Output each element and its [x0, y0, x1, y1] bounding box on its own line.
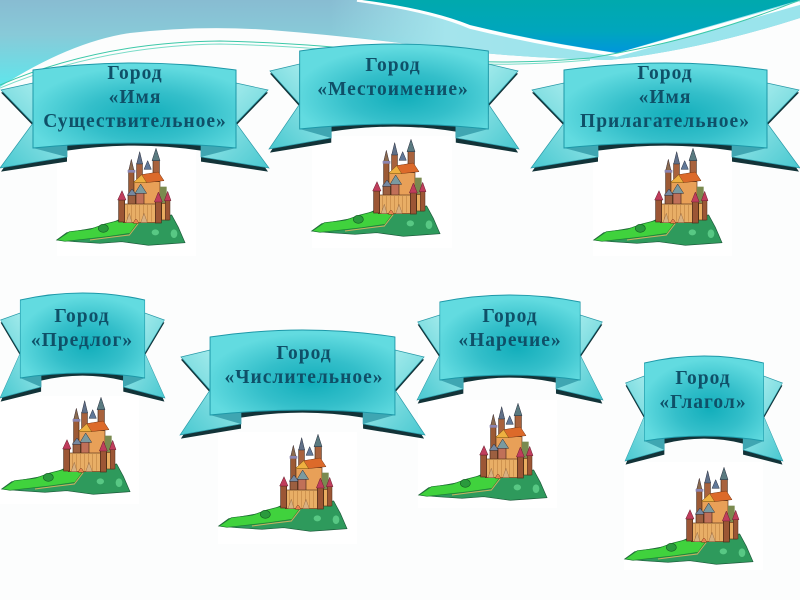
banner: Город Местоимение	[269, 44, 519, 153]
banner: Город Имя Прилагательное	[531, 63, 800, 172]
banner: Город Имя Существительное: «Имя	[109, 87, 161, 108]
banner: Город Числительное	[180, 330, 425, 439]
castle: Существительное	[57, 148, 185, 245]
banner: Город Имя Существительное	[0, 63, 269, 172]
banner: Город Имя Существительное: Город	[107, 63, 163, 84]
banner: Город Наречие: Город	[482, 306, 538, 327]
castle: Прилагательное	[594, 148, 722, 245]
banner: Город Местоимение: «Местоимение»	[317, 79, 469, 100]
castle: Числительное	[219, 434, 347, 531]
banner: Город Наречие: «Наречие»	[458, 330, 562, 351]
banner: Город Числительное: Город	[276, 343, 332, 364]
banner: Город Предлог: «Предлог»	[31, 330, 133, 351]
castle: Местоимение	[312, 139, 440, 236]
banner: Город Предлог	[0, 293, 165, 402]
castle: Предлог	[2, 397, 130, 494]
castle: Наречие	[419, 403, 547, 500]
castle: Глагол	[625, 467, 753, 564]
banner: Город Имя Существительное: Существительное»	[43, 111, 227, 132]
banner: Город Глагол: «Глагол»	[659, 392, 747, 413]
banner: Город Имя Прилагательное: «Имя	[639, 87, 691, 108]
banner: Город Наречие	[417, 295, 603, 404]
panel: white castle backdrops	[0, 136, 763, 570]
banner: Город Имя Прилагательное: Город	[637, 63, 693, 84]
banner: Город Глагол	[625, 356, 783, 465]
banner: Город Местоимение: Город	[365, 55, 421, 76]
header wave decoration	[0, 0, 800, 88]
banner: Город Предлог: Город	[54, 306, 110, 327]
banner: Город Числительное: «Числительное»	[224, 367, 384, 388]
banner: Город Глагол: Город	[675, 368, 731, 389]
banner: Город Имя Прилагательное: Прилагательное»	[580, 111, 750, 132]
